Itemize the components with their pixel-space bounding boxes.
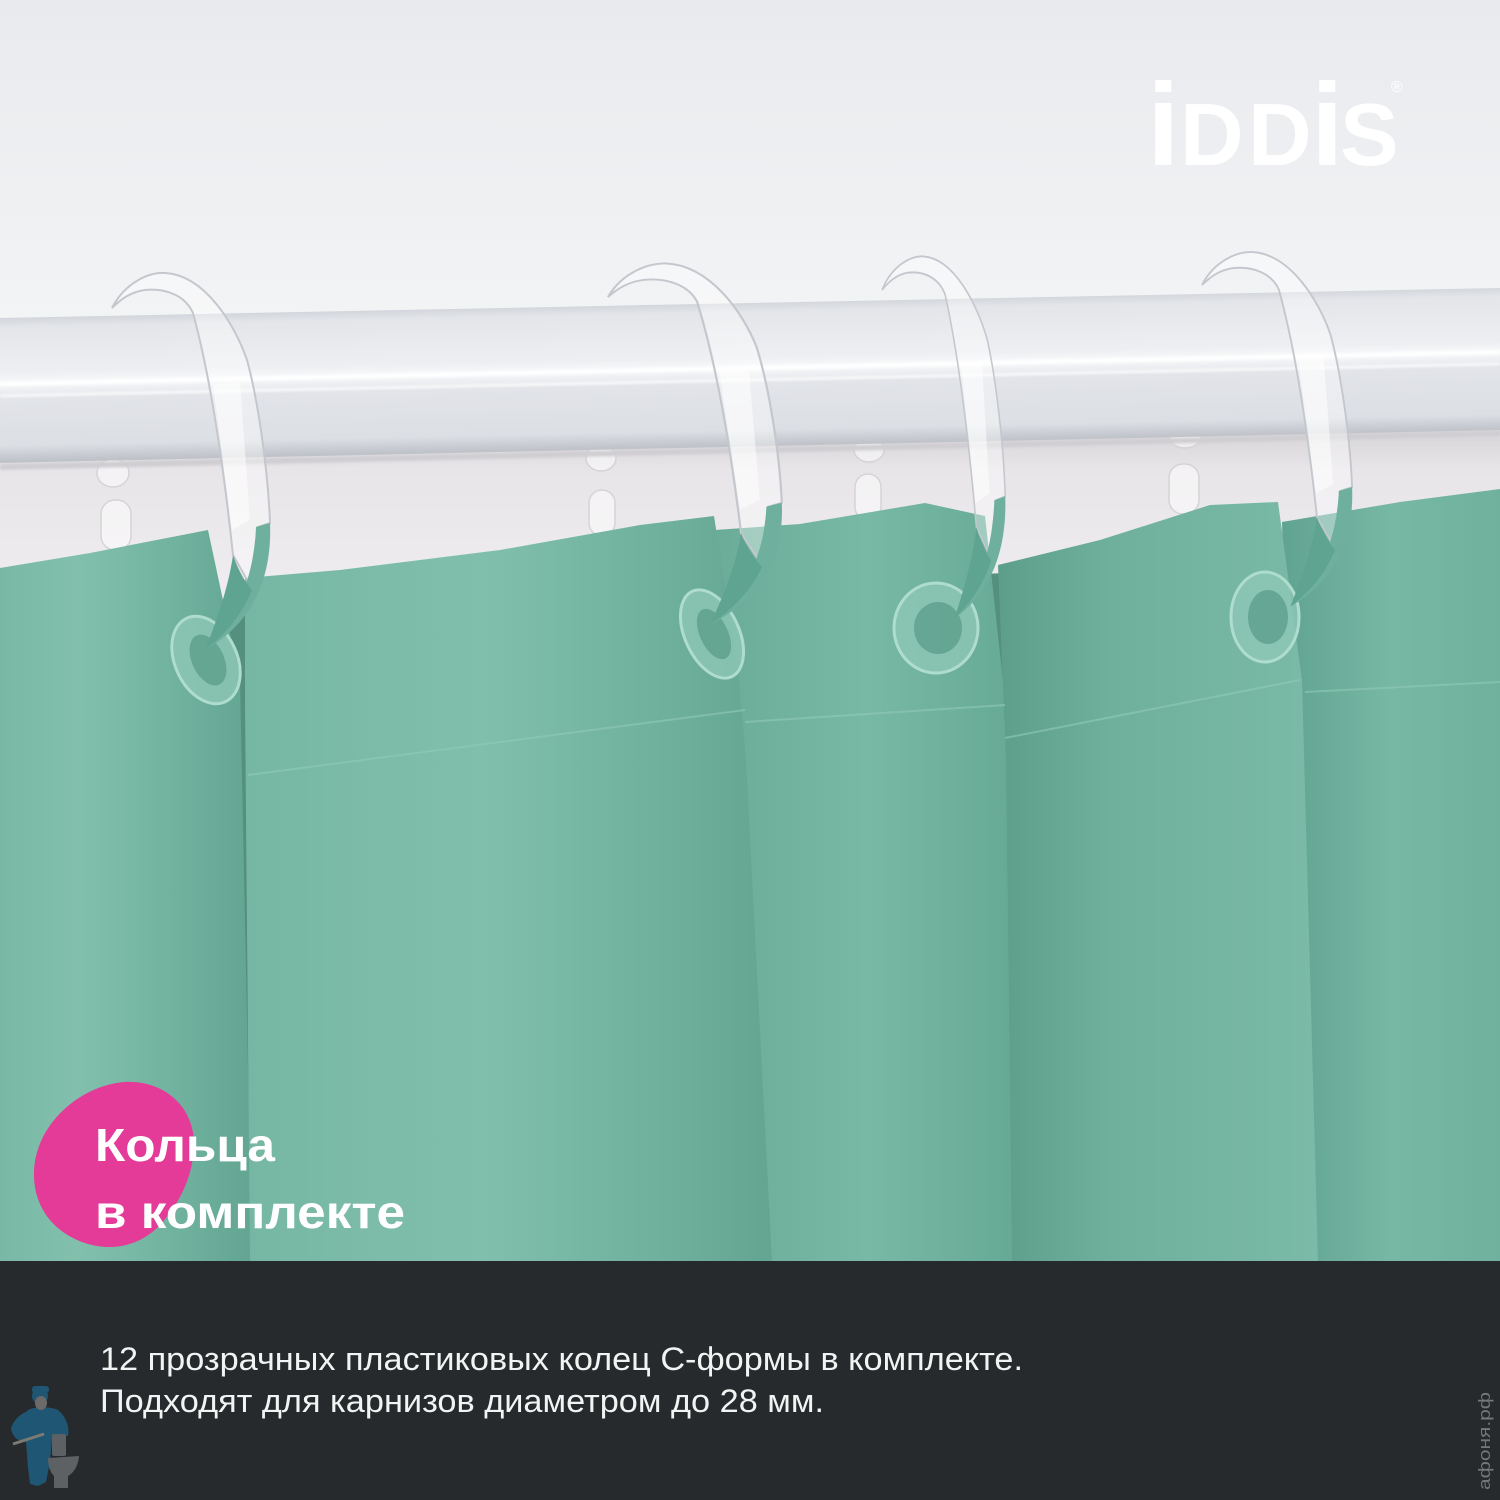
icon: plumber with toilet: [11, 1386, 79, 1488]
description text: 12 прозрачных пластиковых колец С-формы в комплекте.: [100, 1341, 1023, 1377]
plumber: [11, 1386, 69, 1486]
curtain rod: [0, 288, 1500, 470]
ring 3: [882, 256, 1005, 618]
logo: IDDIS: [1147, 59, 1403, 190]
logo: IDDIS: i: [1147, 59, 1180, 190]
hanging beads behind rod: [97, 424, 1201, 550]
watermark: афоня.рф: [1475, 1392, 1494, 1490]
ring 1: [112, 273, 270, 650]
logo: IDDIS: ®: [1391, 79, 1403, 96]
description text: Подходят для карнизов диаметром до 28 мм.: [100, 1383, 824, 1419]
grommets: [158, 572, 1299, 715]
background wall: [0, 0, 1500, 330]
logo: IDDIS: i: [1311, 59, 1344, 190]
stitched hem: [248, 680, 1500, 775]
heading: Кольца: [95, 1119, 275, 1171]
curtain panel 1: [0, 530, 252, 1262]
heading: в комплекте: [95, 1186, 405, 1238]
description text: [100, 1341, 1023, 1419]
curtain panel 5: [1282, 489, 1500, 1262]
logo: IDDIS: D: [1180, 85, 1244, 184]
wrench: [13, 1434, 44, 1444]
footer panel: [0, 1261, 1500, 1500]
logo: IDDIS: S: [1340, 85, 1399, 184]
curtain: [0, 489, 1500, 1262]
curtain panel 4: [998, 502, 1318, 1262]
curtain panel 2: [245, 516, 772, 1262]
ring 4: [1202, 252, 1352, 606]
face: [35, 1396, 47, 1410]
backdrop below rod: [0, 430, 1500, 630]
ring 2: [608, 263, 782, 624]
heading: [95, 1119, 405, 1238]
curtain panel 3: [715, 503, 1018, 1262]
logo: IDDIS: D: [1248, 85, 1312, 184]
pink blob: [34, 1082, 194, 1247]
curtain base shadow: [200, 560, 1400, 1262]
toilet: [48, 1434, 79, 1488]
